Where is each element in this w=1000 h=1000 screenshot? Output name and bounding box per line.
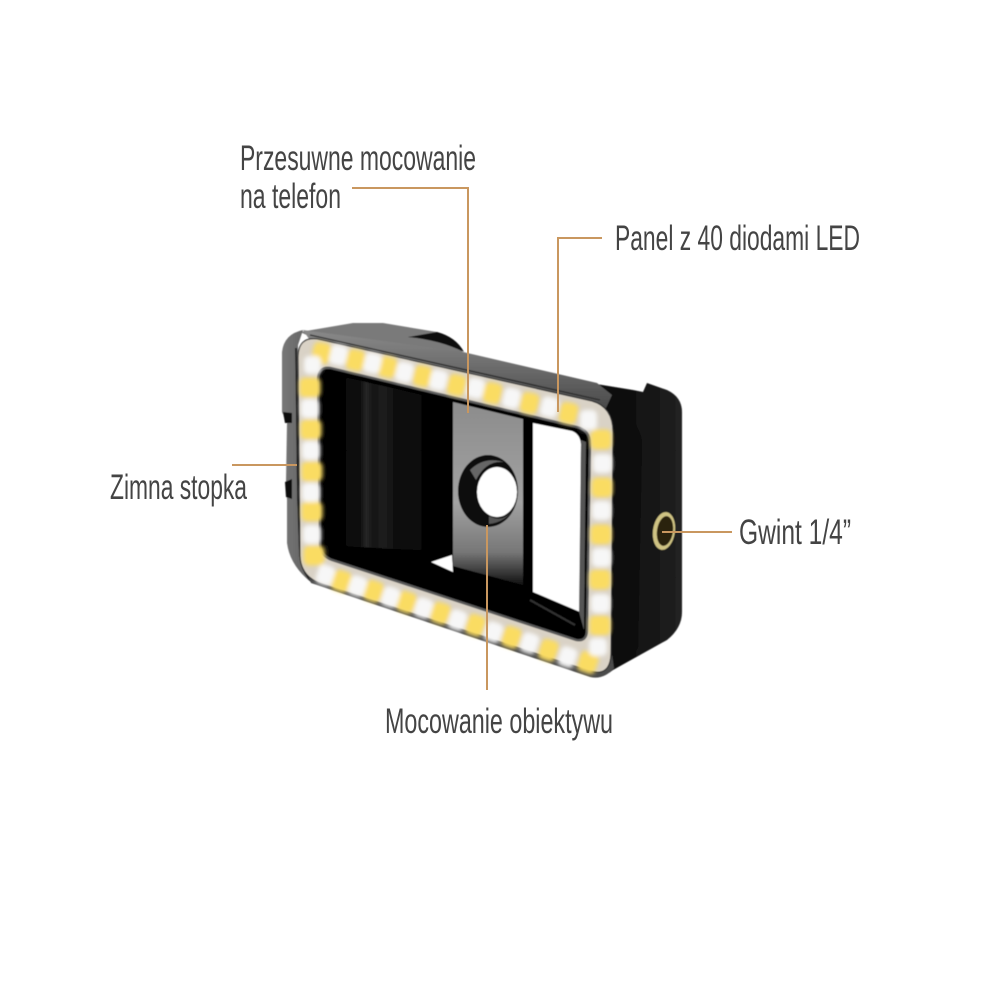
- tripod thread socket: [650, 511, 678, 551]
- leader: lens mount: [486, 525, 488, 690]
- left grey edge with notches: [282, 330, 320, 583]
- label: cold shoe: Zimna stopka: [110, 468, 247, 507]
- lens mount hole: [458, 455, 518, 527]
- label: LED panel: Panel z 40 diodami LED: [615, 219, 860, 258]
- LED diodes: [301, 343, 611, 673]
- right white window: [533, 423, 581, 612]
- right body: [590, 383, 682, 676]
- bottom lip: [308, 576, 614, 678]
- label: sliding phone mount: Przesuwne mocowanie: [240, 139, 476, 178]
- leader: LED panel: [558, 238, 602, 412]
- leader: sliding phone mount: [352, 188, 468, 413]
- inner ribbed clamp: [322, 372, 453, 552]
- LED ring base: [298, 339, 613, 672]
- label: sliding phone mount: na telefon: [240, 177, 341, 216]
- window interior: [318, 368, 590, 640]
- sliding plate: [453, 402, 523, 585]
- label: lens mount: Mocowanie obiektywu: [385, 702, 613, 741]
- label: sliding phone mount: [240, 139, 476, 216]
- leader: cold shoe: [232, 464, 297, 466]
- white cut-out behind clamp: [431, 555, 453, 572]
- rear clip on top edge: [300, 323, 470, 380]
- leader: thread: [662, 531, 732, 533]
- top surface: [303, 330, 612, 408]
- device: LED light frame: [282, 323, 682, 678]
- label: thread: Gwint 1/4”: [739, 513, 851, 552]
- bottom shelf highlight: [530, 600, 575, 625]
- inner frame edge: [318, 368, 590, 640]
